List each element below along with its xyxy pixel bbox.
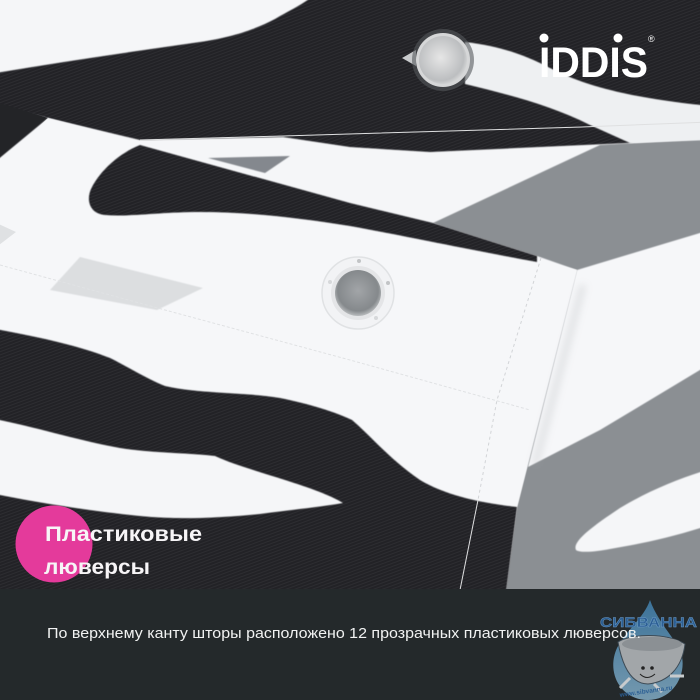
hem horizontal stitching <box>0 265 530 410</box>
watermark: Sibvanna bath logo <box>600 600 697 700</box>
heading: plastic grommets: люверсы <box>44 556 150 579</box>
icon: front grommet <box>322 257 394 329</box>
left dark fold <box>0 100 48 166</box>
watermark bath <box>618 636 685 684</box>
pale grey print patches <box>50 257 203 310</box>
watermark drop <box>613 600 683 700</box>
watermark bath legs <box>620 676 684 692</box>
soft shadow beside the hem <box>535 285 583 465</box>
icon: top grommet <box>402 29 474 91</box>
logo: IDDIS: IDDIS <box>539 39 648 87</box>
front white zebra stripe <box>0 418 343 518</box>
hem vertical stitching <box>478 258 541 500</box>
thread below the hem <box>460 500 478 590</box>
front panel white fabric <box>0 118 577 600</box>
back panel white elongated shape <box>575 469 700 552</box>
heading: plastic grommets: Пластиковые <box>45 523 202 546</box>
description text: По верхнему канту шторы расположено 12 прозрачных пластиковых люверсов. <box>47 626 641 642</box>
front lower black stripe <box>0 328 517 600</box>
heading badge: pink circle <box>16 506 92 582</box>
bottom dark bar <box>0 589 700 700</box>
back panel white shape right of hem <box>528 230 700 467</box>
watermark url: www.sibvanna.ru <box>618 685 673 699</box>
front black blob and tail <box>89 145 537 262</box>
small grey triangle in the back fold <box>208 156 290 173</box>
back panel grey zebra stripe <box>433 139 700 600</box>
watermark face <box>641 666 645 670</box>
white diagonal stripe behind the top grommet <box>465 42 700 143</box>
watermark wordmark: СИБВАННА <box>600 615 697 630</box>
logo: IDDIS: ® <box>648 34 655 44</box>
top black stripe <box>0 0 700 152</box>
back stitching line <box>140 122 700 140</box>
